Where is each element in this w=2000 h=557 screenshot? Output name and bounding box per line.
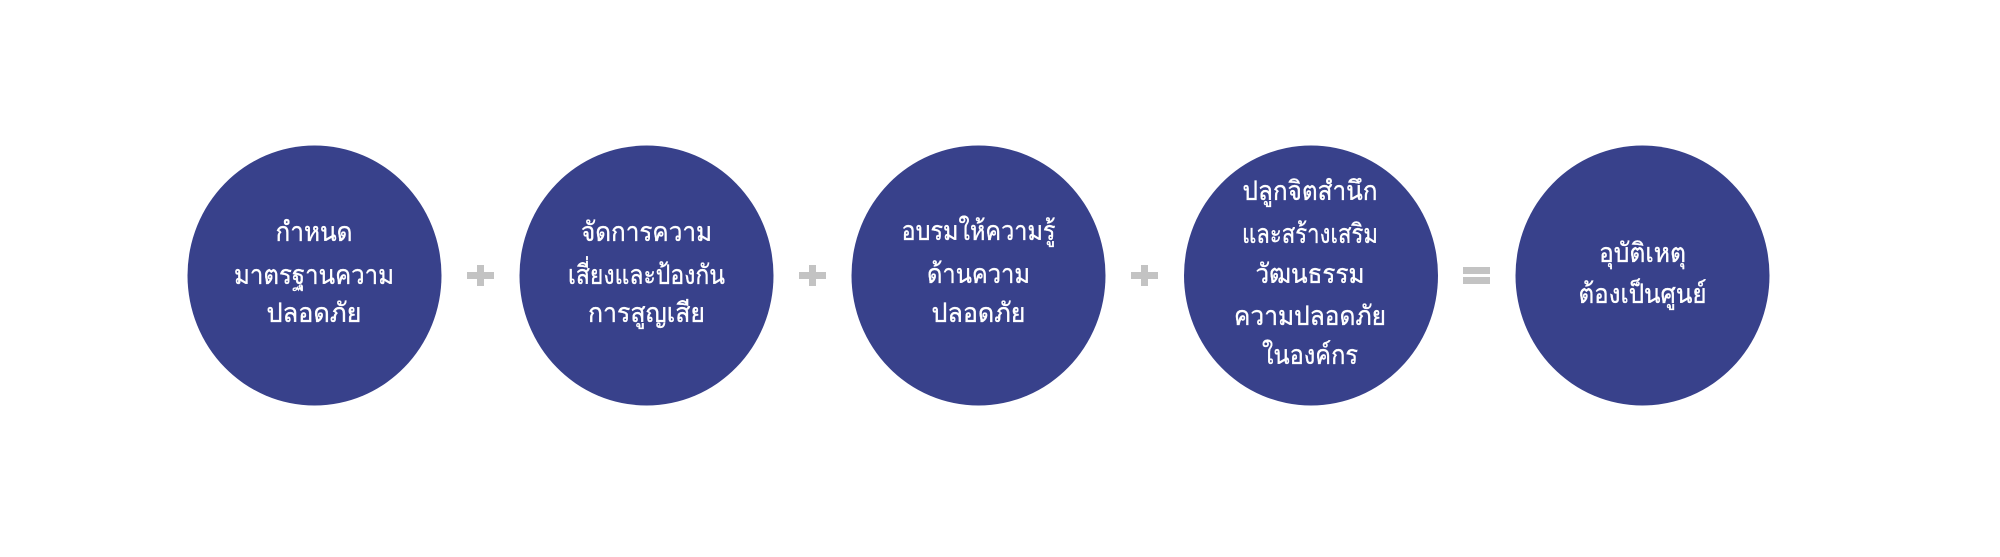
panel: manage risk and prevent loss: จัดการความ	[581, 217, 712, 247]
icon: equals	[1463, 267, 1490, 284]
panel: manage risk and prevent loss: การสูญเสีย	[588, 298, 705, 329]
panel: build safety culture: วัฒนธรรม	[1256, 259, 1364, 289]
panel: set safety standards: มาตรฐานความ	[234, 260, 394, 291]
panel: build safety culture: ปลูกจิตสำนึก	[1242, 176, 1378, 207]
icon: plus 1	[467, 265, 494, 286]
icon: plus 3	[1131, 265, 1158, 286]
panel: zero accidents: ต้องเป็นศูนย์	[1578, 276, 1706, 310]
panel: safety training: ปลอดภัย	[932, 298, 1026, 328]
panel: set safety standards	[188, 146, 442, 406]
panel: manage risk and prevent loss: เสี่ยงและป้องกัน	[568, 256, 725, 290]
panel: safety training	[852, 146, 1106, 406]
panel: zero accidents	[1516, 146, 1770, 406]
panel: build safety culture	[1184, 146, 1438, 406]
panel: zero accidents: อุบัติเหตุ	[1599, 238, 1686, 270]
panel: manage risk and prevent loss	[520, 146, 774, 406]
panel: set safety standards: ปลอดภัย	[266, 298, 362, 328]
panel: safety training: อบรมให้ความรู้	[902, 215, 1056, 247]
panel: safety training: ด้านความ	[927, 259, 1030, 289]
panel: build safety culture: และสร้างเสริม	[1242, 219, 1378, 249]
panel: build safety culture: ในองค์กร	[1262, 339, 1358, 370]
panel: build safety culture: ความปลอดภัย	[1234, 301, 1386, 331]
panel: set safety standards: กำหนด	[276, 217, 352, 247]
icon: plus 2	[799, 265, 826, 286]
